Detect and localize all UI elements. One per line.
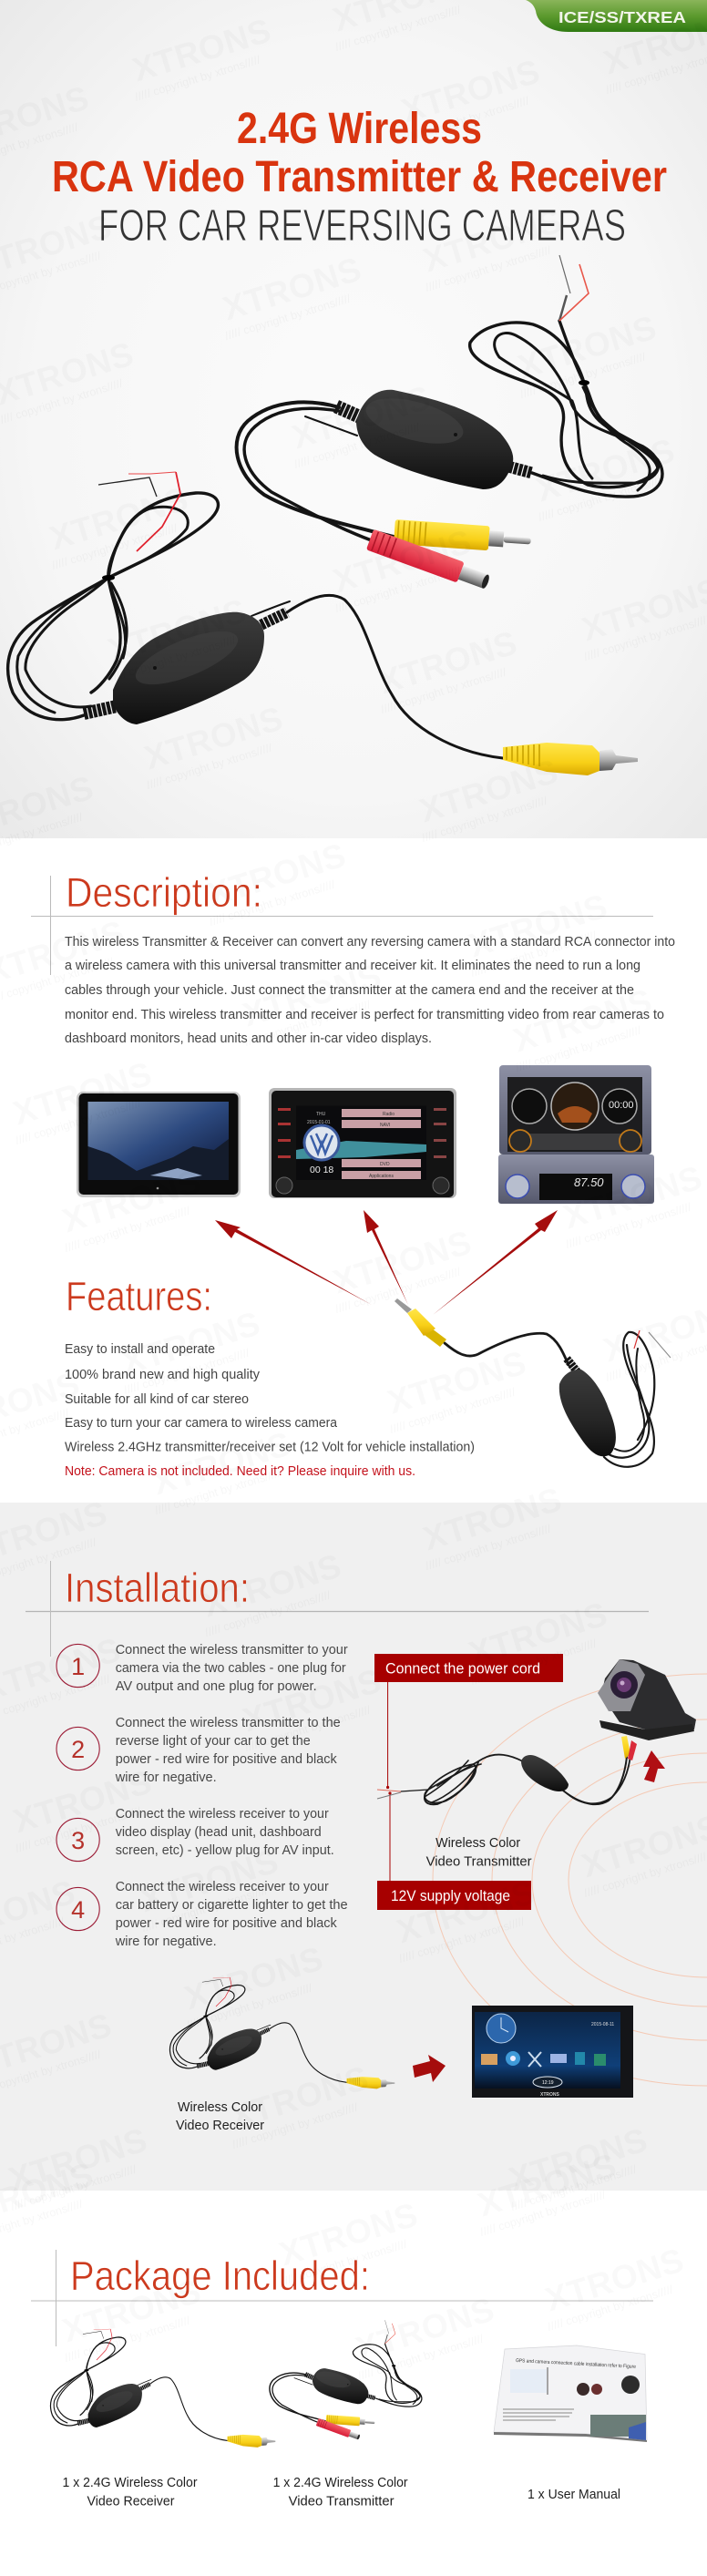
step 1: AV output and one plug for power. — [116, 1678, 317, 1694]
watermarks: XTRONS — [9, 1055, 156, 1132]
watermarks: ///// copyright by xtrons///// — [243, 1703, 373, 1754]
watermarks: XTRONS — [180, 1940, 327, 2017]
watermarks: ///// copyright by xtrons///// — [108, 633, 238, 684]
monitor: VW head unit: THU — [316, 1112, 326, 1117]
watermarks: ///// copyright by xtrons///// — [63, 1204, 192, 1255]
watermarks: XTRONS — [128, 12, 275, 88]
watermarks: ///// copyright by xtrons///// — [397, 1914, 527, 1965]
description text: monitor end. This wireless transmitter and receiver is perfect for transmitting video from rear cameras to — [65, 1008, 664, 1022]
watermarks: XTRONS — [419, 1481, 566, 1557]
watermarks: ///// copyright by xtrons///// — [63, 2314, 192, 2365]
watermarks: XTRONS — [329, 1224, 476, 1300]
step 2: power - red wire for positive and black — [116, 1751, 337, 1767]
watermarks: ///// copyright by xtrons///// — [469, 1637, 599, 1688]
package item: transmitter: 1 x 2.4G Wireless Color — [273, 2475, 408, 2490]
watermarks: ///// copyright by xtrons///// — [333, 3, 463, 54]
feature list: Easy to turn your car camera to wireless camera — [65, 1416, 337, 1431]
watermarks: XTRONS — [140, 700, 287, 776]
description text: a wireless camera with this universal transmitter and receiver kit. It eliminates the need to run a long — [65, 959, 640, 973]
watermarks: XTRONS — [514, 309, 661, 385]
watermarks: XTRONS — [559, 1159, 706, 1236]
watermarks: ///// copyright by xtrons///// — [333, 1265, 463, 1316]
panel: features — [65, 1273, 671, 1479]
watermarks: XTRONS — [465, 888, 611, 964]
watermarks: ///// copyright by xtrons///// — [140, 1883, 270, 1935]
monitor: VW head unit: DVD — [380, 1162, 390, 1167]
package item: user manual — [494, 2345, 647, 2442]
watermarks: ///// copyright by xtrons///// — [518, 350, 648, 401]
watermarks: XTRONS — [532, 432, 679, 508]
watermarks: ///// copyright by xtrons///// — [203, 1588, 333, 1639]
watermarks: ///// copyright by xtrons///// — [420, 794, 549, 845]
watermarks: XTRONS — [374, 624, 521, 701]
package item: transmitter: Video Transmitter — [289, 2493, 394, 2509]
feature list: Wireless 2.4GHz transmitter/receiver set (12 Volt for vehicle installation) — [65, 1440, 475, 1454]
watermarks: ///// copyright by xtrons///// — [185, 1981, 314, 2032]
monitor: VW head unit: NAVI — [380, 1123, 390, 1128]
callout: 12V supply voltage — [377, 1791, 531, 1910]
feature list: Easy to install and operate — [65, 1342, 215, 1357]
watermarks: XTRONS — [58, 1163, 205, 1239]
panel: installation — [0, 1503, 707, 2191]
watermarks: ///// copyright by xtrons///// — [402, 94, 531, 145]
panel: hero — [0, 0, 707, 838]
title — [52, 105, 667, 251]
arrow: receiver to display — [413, 2055, 446, 2082]
step 4: wire for negative. — [115, 1934, 217, 1949]
step 1 — [56, 1642, 348, 1694]
arrow: to flip-out unit — [433, 1210, 558, 1315]
label: wireless color video transmitter: Wireless Color — [435, 1835, 520, 1851]
package item: receiver: 1 x 2.4G Wireless Color — [62, 2475, 197, 2490]
package item label: user manual: 1 x User Manual — [528, 2487, 620, 2502]
watermarks: ///// copyright by xtrons///// — [14, 1096, 143, 1147]
watermarks: XTRONS — [288, 379, 435, 456]
watermarks: XTRONS — [474, 2147, 620, 2223]
watermarks: ///// copyright by xtrons///// — [280, 2237, 409, 2288]
watermarks: XTRONS — [104, 592, 251, 669]
watermarks: XTRONS — [397, 53, 544, 129]
watermarks: XTRONS — [505, 2121, 651, 2198]
watermarks: ///// copyright by xtrons///// — [509, 2162, 639, 2213]
head unit display: 2015-08-11 — [591, 2022, 614, 2027]
step 3: screen, etc) - yellow plug for AV input. — [116, 1842, 334, 1858]
receiver product — [169, 1977, 394, 2089]
watermarks: XTRONS — [352, 2291, 498, 2367]
watermarks: XTRONS — [415, 753, 562, 829]
watermarks: ///// copyright by xtrons///// — [50, 521, 179, 572]
description text: cables through your vehicle. Just connect the transmitter at the camera end and the receiver at the — [65, 983, 634, 998]
watermarks: ///// copyright by xtrons///// — [564, 1200, 693, 1251]
package item: user manual: GPS and camera connection cable installation refer to Figure — [516, 2358, 636, 2370]
watermarks: ///// copyright by xtrons///// — [514, 1023, 643, 1074]
step 1: 1 — [71, 1653, 85, 1680]
head unit display: XTRONS — [540, 2092, 559, 2098]
heading: description — [31, 869, 653, 975]
label: wireless color video receiver — [176, 2099, 264, 2133]
watermarks: ///// copyright by xtrons///// — [208, 877, 337, 929]
step 4: power - red wire for positive and black — [116, 1915, 337, 1931]
watermarks: XTRONS — [58, 2273, 205, 2349]
watermarks: ///// copyright by xtrons///// — [424, 1522, 553, 1573]
step 3: video display (head unit, dashboard — [116, 1824, 322, 1840]
watermarks: XTRONS — [226, 2059, 373, 2136]
callout: connect the power cord: Connect the power cord — [385, 1660, 540, 1677]
watermarks: XTRONS — [419, 202, 566, 279]
description text — [65, 935, 675, 1046]
heading: features: Features: — [66, 1273, 212, 1319]
camera — [598, 1659, 696, 1740]
watermarks: XTRONS — [384, 1344, 530, 1421]
watermarks: XTRONS — [239, 1662, 385, 1739]
feature list: 100% brand new and high quality — [65, 1368, 261, 1382]
step 3: Connect the wireless receiver to your — [116, 1806, 329, 1822]
panel: package included — [31, 2250, 653, 2509]
monitor: VW head unit — [269, 1088, 456, 1198]
watermarks: XTRONS — [509, 982, 656, 1059]
watermarks: ///// copyright by xtrons///// — [537, 473, 666, 524]
watermarks: ///// copyright by xtrons///// — [133, 53, 262, 104]
title: 2.4G Wireless — [237, 105, 482, 153]
watermarks: ///// copyright by xtrons///// — [145, 741, 274, 792]
step 4: 4 — [71, 1896, 85, 1924]
step 2: 2 — [71, 1736, 85, 1763]
step 4: car battery or cigarette lighter to get the — [116, 1897, 348, 1913]
package item: receiver: Video Receiver — [87, 2493, 175, 2509]
monitor: flip-out head unit — [498, 1065, 654, 1204]
transmitter with cables — [377, 1736, 637, 1804]
monitor: flip-out head unit: 87.50 — [574, 1175, 604, 1189]
arrow: to camera — [643, 1750, 665, 1782]
description text: This wireless Transmitter & Receiver can convert any reversing camera with a standard RCA connector into — [65, 935, 675, 949]
model code tab: ICE/SS/TXREA — [558, 8, 686, 26]
watermarks: XTRONS — [239, 957, 385, 1033]
watermarks: XTRONS — [465, 1596, 611, 1672]
watermarks: ///// copyright by xtrons///// — [243, 998, 373, 1049]
watermarks: ///// copyright by xtrons///// — [9, 2162, 138, 2213]
watermarks: XTRONS — [9, 1763, 156, 1840]
description text: dashboard monitors, head units and other in-car video displays. — [65, 1031, 432, 1046]
watermarks: XTRONS — [118, 1305, 264, 1381]
watermarks: ///// copyright by xtrons///// — [122, 1346, 251, 1397]
step 4 — [56, 1879, 348, 1949]
watermarks: ///// copyright by xtrons///// — [292, 420, 422, 471]
package item: transmitter — [270, 2320, 422, 2509]
label: wireless color video transmitter: Video Transmitter — [426, 1853, 532, 1870]
watermarks: ///// copyright by xtrons///// — [379, 665, 508, 716]
watermarks: XTRONS — [393, 1873, 539, 1950]
head unit display — [472, 2006, 633, 2098]
watermarks: XTRONS — [136, 1842, 282, 1919]
heading: installation: Installation: — [65, 1565, 250, 1611]
arrow: to head unit — [364, 1210, 408, 1305]
monitor: VW head unit: Radio — [383, 1112, 394, 1117]
watermarks: ///// copyright by xtrons///// — [546, 2283, 675, 2334]
callout: 12V supply voltage: 12V supply voltage — [391, 1888, 510, 1904]
label: wireless color video transmitter — [426, 1835, 532, 1870]
product photo: receiver with plug — [394, 1298, 671, 1467]
watermarks: XTRONS — [329, 523, 476, 600]
callout: connect the power cord — [374, 1654, 563, 1789]
feature list: Suitable for all kind of car stereo — [65, 1392, 249, 1407]
heading: description: Description: — [66, 869, 262, 916]
panel: description — [31, 869, 675, 1315]
watermarks: XTRONS — [149, 1425, 295, 1502]
monitor: headrest screen — [77, 1092, 241, 1197]
watermarks: ///// copyright by xtrons///// — [356, 2332, 486, 2383]
watermarks: ///// copyright by xtrons///// — [424, 243, 553, 294]
watermarks: ///// copyright by xtrons///// — [14, 1804, 143, 1855]
monitor: VW head unit: Applications — [369, 1174, 394, 1179]
step 1: Connect the wireless transmitter to your — [116, 1642, 348, 1657]
watermarks: XTRONS — [203, 836, 350, 913]
heading: package included — [31, 2250, 653, 2346]
head unit display: 12:19 — [542, 2080, 554, 2086]
heading: package included: Package Included: — [70, 2253, 370, 2299]
model code tab — [526, 0, 707, 32]
step 2: wire for negative. — [115, 1770, 217, 1785]
monitor: VW head unit: 2015-01-01 — [307, 1120, 331, 1125]
product photo: transmitter — [237, 255, 662, 592]
step 2: Connect the wireless transmitter to the — [116, 1715, 341, 1730]
step 4: Connect the wireless receiver to your — [116, 1879, 329, 1894]
watermarks: ///// copyright by xtrons///// — [153, 1466, 282, 1517]
watermarks: XTRONS — [541, 2242, 688, 2318]
arrow: to headrest screen — [215, 1220, 372, 1305]
watermarks: ///// copyright by xtrons///// — [231, 2100, 360, 2151]
watermarks: XTRONS — [199, 1547, 345, 1624]
step 2 — [56, 1715, 341, 1785]
step 3: 3 — [71, 1827, 85, 1854]
step 3 — [56, 1806, 334, 1862]
feature list: Note: Camera is not included. Need it? Please inquire with us. — [65, 1464, 415, 1479]
watermarks: ///// copyright by xtrons///// — [388, 1385, 517, 1436]
feature list — [65, 1342, 475, 1479]
monitor: VW head unit: 00 18 — [310, 1165, 333, 1175]
watermarks: XTRONS — [275, 2196, 422, 2273]
decorative rings — [433, 1674, 707, 2086]
monitor: flip-out head unit: 00:00 — [609, 1100, 634, 1111]
watermarks: ///// copyright by xtrons///// — [469, 929, 599, 980]
watermarks: ///// copyright by xtrons///// — [478, 2188, 608, 2239]
watermarks: XTRONS — [5, 2121, 151, 2198]
label: wireless color video receiver: Wireless Color — [178, 2099, 262, 2115]
step 1: camera via the two cables - one plug for — [116, 1660, 346, 1676]
package item: receiver — [50, 2329, 275, 2509]
watermarks: ///// copyright by xtrons///// — [223, 292, 353, 343]
watermarks: ///// copyright by xtrons///// — [333, 564, 463, 615]
watermarks: XTRONS — [46, 480, 192, 557]
step 2: reverse light of your car to get the — [116, 1733, 311, 1749]
watermarks: XTRONS — [219, 251, 365, 327]
product photo: receiver — [8, 472, 638, 775]
label: wireless color video receiver: Video Receiver — [176, 2118, 264, 2133]
